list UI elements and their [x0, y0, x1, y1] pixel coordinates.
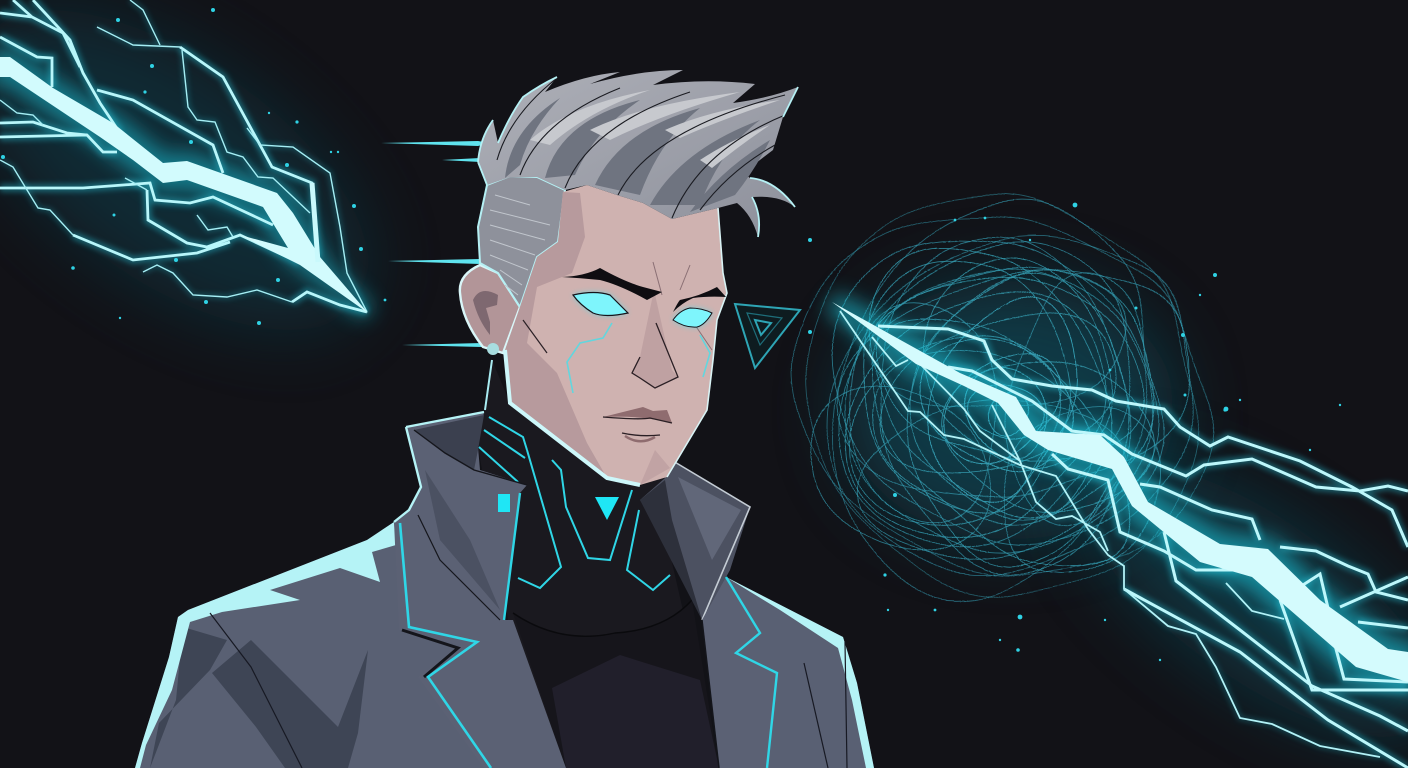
right sparks — [808, 203, 1341, 661]
left sparks — [1, 8, 386, 325]
right lightning bolt — [832, 302, 1408, 768]
face — [505, 185, 727, 485]
glowing eyes — [573, 292, 712, 327]
neck circuit lines — [479, 360, 670, 590]
shaved side of head — [478, 176, 565, 307]
nose and mouth — [603, 323, 678, 441]
hair — [478, 70, 798, 237]
ear — [460, 265, 520, 355]
orb: tangled energy threads — [733, 122, 1267, 668]
black undershirt — [478, 360, 719, 768]
collar square stud — [498, 494, 510, 512]
cheek circuit cracks — [567, 323, 710, 393]
left lightning bolt — [0, 0, 368, 313]
right collar and lapel — [640, 455, 777, 768]
eyebrows — [562, 268, 726, 312]
triangle icon — [735, 304, 800, 368]
left collar and lapel — [394, 412, 566, 768]
speed lines beside head — [380, 141, 490, 347]
neck triangle — [595, 497, 619, 520]
jacket — [135, 522, 874, 768]
